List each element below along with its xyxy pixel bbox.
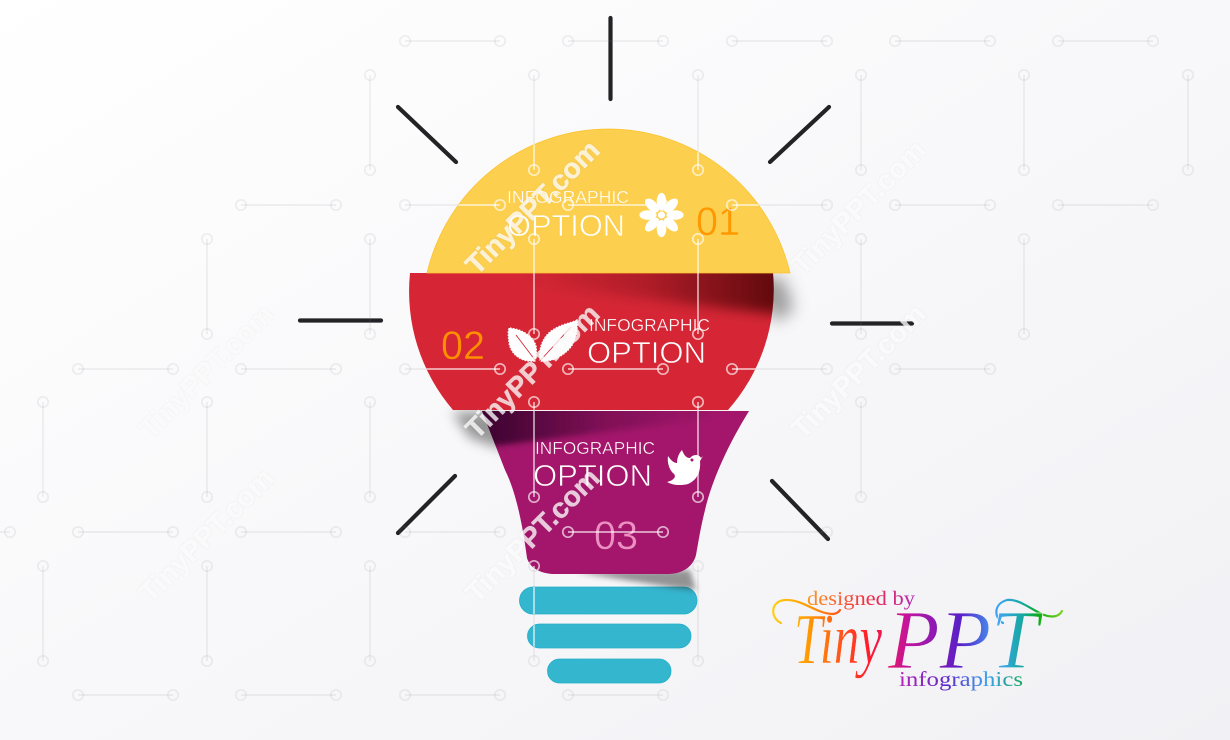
red shape bbox=[409, 273, 774, 410]
light bulb bbox=[409, 129, 795, 683]
screw base bars bbox=[520, 587, 697, 683]
shadow under purple section bbox=[575, 570, 696, 590]
panel: option 03 bbox=[452, 403, 749, 574]
icon: bird bbox=[667, 450, 703, 485]
icon: leaves bbox=[508, 320, 577, 363]
option 03 label: OPTION bbox=[533, 458, 652, 493]
watermarks: TinyPPT.com bbox=[133, 462, 280, 609]
number 03: 03 bbox=[594, 514, 638, 558]
designed by: designed by bbox=[807, 588, 915, 610]
purple shape bbox=[482, 411, 749, 574]
logo flourishes bbox=[773, 600, 1062, 623]
watermarks: TinyPPT.com bbox=[459, 298, 606, 445]
left cast shadow bbox=[452, 412, 505, 450]
watermarks: TinyPPT.com bbox=[459, 134, 606, 281]
option 01 label: OPTION bbox=[507, 208, 625, 243]
watermarks: TinyPPT.com bbox=[133, 298, 280, 445]
right cast shadow bbox=[745, 278, 794, 322]
light rays bbox=[300, 18, 912, 539]
PPT: PPT bbox=[887, 594, 1043, 687]
panel: option 01 bbox=[427, 129, 790, 273]
number 02: 02 bbox=[441, 324, 485, 368]
circuit line grid over bulb bbox=[426, 144, 760, 648]
logo: designed by TinyPPT infographics bbox=[773, 588, 1062, 691]
infographics: infographics bbox=[899, 667, 1023, 691]
option 02 label: OPTION bbox=[587, 335, 706, 370]
number 01: 01 bbox=[696, 200, 740, 244]
panel: option 02 bbox=[409, 262, 795, 410]
yellow dome bbox=[427, 129, 790, 273]
option 03 heading: INFOGRAPHIC bbox=[535, 438, 655, 458]
Tiny: Tiny bbox=[794, 599, 882, 679]
icon: flower bbox=[639, 193, 684, 237]
watermarks bbox=[133, 134, 932, 609]
inner shadow bbox=[482, 411, 700, 450]
option 01 heading: INFOGRAPHIC bbox=[507, 187, 629, 207]
inner shadow bbox=[541, 273, 774, 322]
watermarks: TinyPPT.com bbox=[459, 462, 606, 609]
watermarks: TinyPPT.com bbox=[785, 298, 932, 445]
option 02 heading: INFOGRAPHIC bbox=[589, 315, 710, 335]
watermarks: TinyPPT.com bbox=[785, 134, 932, 281]
